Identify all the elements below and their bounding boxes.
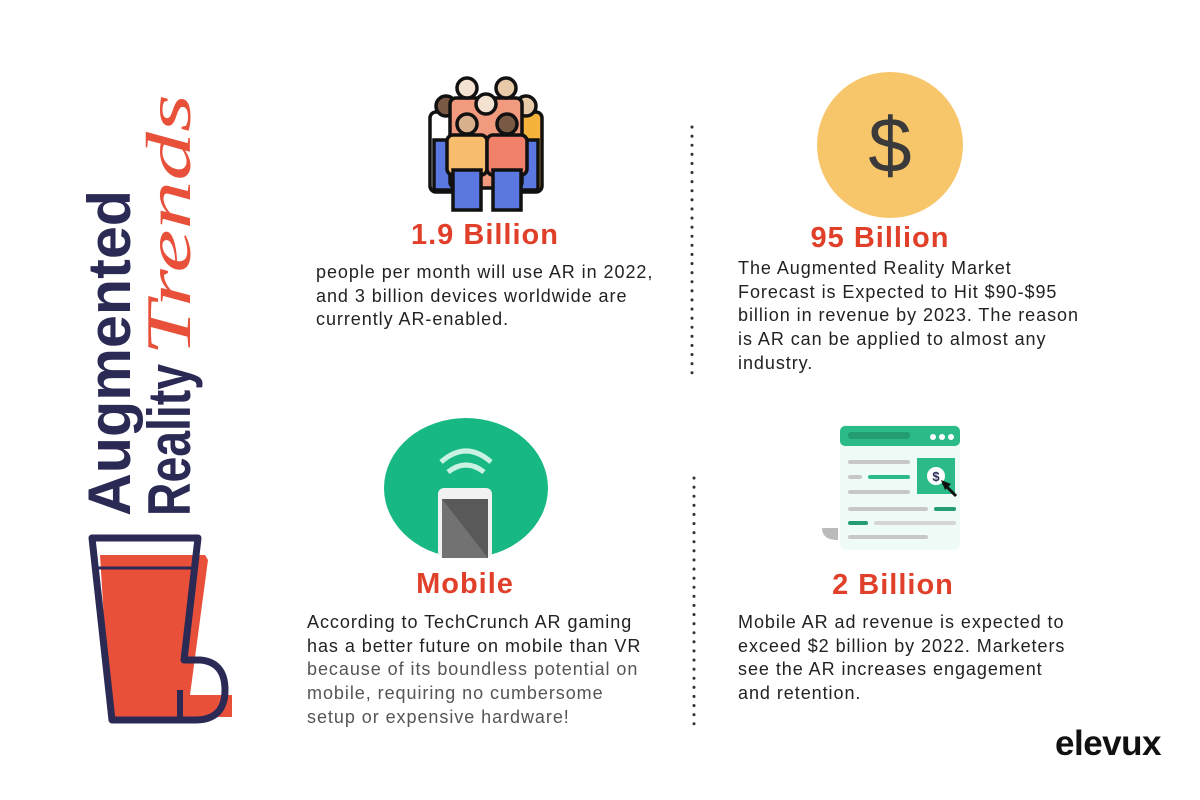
- text: 2 Billion body: [738, 612, 1065, 703]
- text: 2 Billion body: and retention.: [738, 683, 861, 703]
- text: 95 Billion body: The Augmented Reality Market: [738, 258, 1012, 278]
- text: 2 Billion body: Mobile AR ad revenue is expected to: [738, 612, 1064, 632]
- title: Augmented Reality Trends: Reality: [136, 364, 203, 516]
- heading: Mobile: Mobile: [416, 568, 514, 600]
- icon: dollar coin: $: [868, 101, 912, 189]
- icon: cup: [92, 538, 232, 720]
- dividers: [690, 127, 694, 378]
- title: Augmented Reality Trends: Augmented: [76, 190, 143, 516]
- icon: web ad page: $: [932, 469, 940, 484]
- text: Mobile body: has a better future on mobile than VR: [307, 636, 641, 656]
- text: 1.9 Billion body: currently AR-enabled.: [316, 309, 509, 329]
- logo: elevux: elevux: [1055, 724, 1161, 763]
- icon: web ad page: [822, 425, 960, 550]
- title: Augmented Reality Trends: Trends: [133, 94, 204, 356]
- text: Mobile body: According to TechCrunch AR gaming: [307, 612, 632, 632]
- text: Mobile body: because of its boundless potential on: [307, 659, 638, 679]
- icon: mobile phone: [380, 418, 550, 566]
- text: 95 Billion body: [738, 258, 1079, 373]
- icon: dollar coin: [817, 72, 963, 218]
- icon: people group: [430, 78, 542, 210]
- text: 1.9 Billion body: people per month will use AR in 2022,: [316, 262, 653, 282]
- title: Augmented Reality Trends: [76, 94, 204, 516]
- text: Mobile body: mobile, requiring no cumbersome: [307, 683, 604, 703]
- text: Mobile body: setup or expensive hardware!: [307, 707, 570, 727]
- text: 95 Billion body: is AR can be applied to almost any: [738, 329, 1046, 349]
- text: 2 Billion body: exceed $2 billion by 2022. Marketers: [738, 636, 1065, 656]
- text: 1.9 Billion body: [316, 262, 653, 329]
- text: 95 Billion body: billion in revenue by 2023. The reason: [738, 305, 1079, 325]
- text: 95 Billion body: industry.: [738, 353, 813, 373]
- text: 1.9 Billion body: and 3 billion devices worldwide are: [316, 286, 627, 306]
- heading: 1.9 Billion: 1.9 Billion: [411, 219, 559, 251]
- text: Mobile body: [307, 612, 641, 727]
- heading: 2 Billion: 2 Billion: [832, 569, 954, 601]
- heading: 95 Billion: 95 Billion: [811, 222, 949, 254]
- text: 95 Billion body: Forecast is Expected to Hit $90-$95: [738, 282, 1057, 302]
- text: 2 Billion body: see the AR increases engagement: [738, 659, 1043, 679]
